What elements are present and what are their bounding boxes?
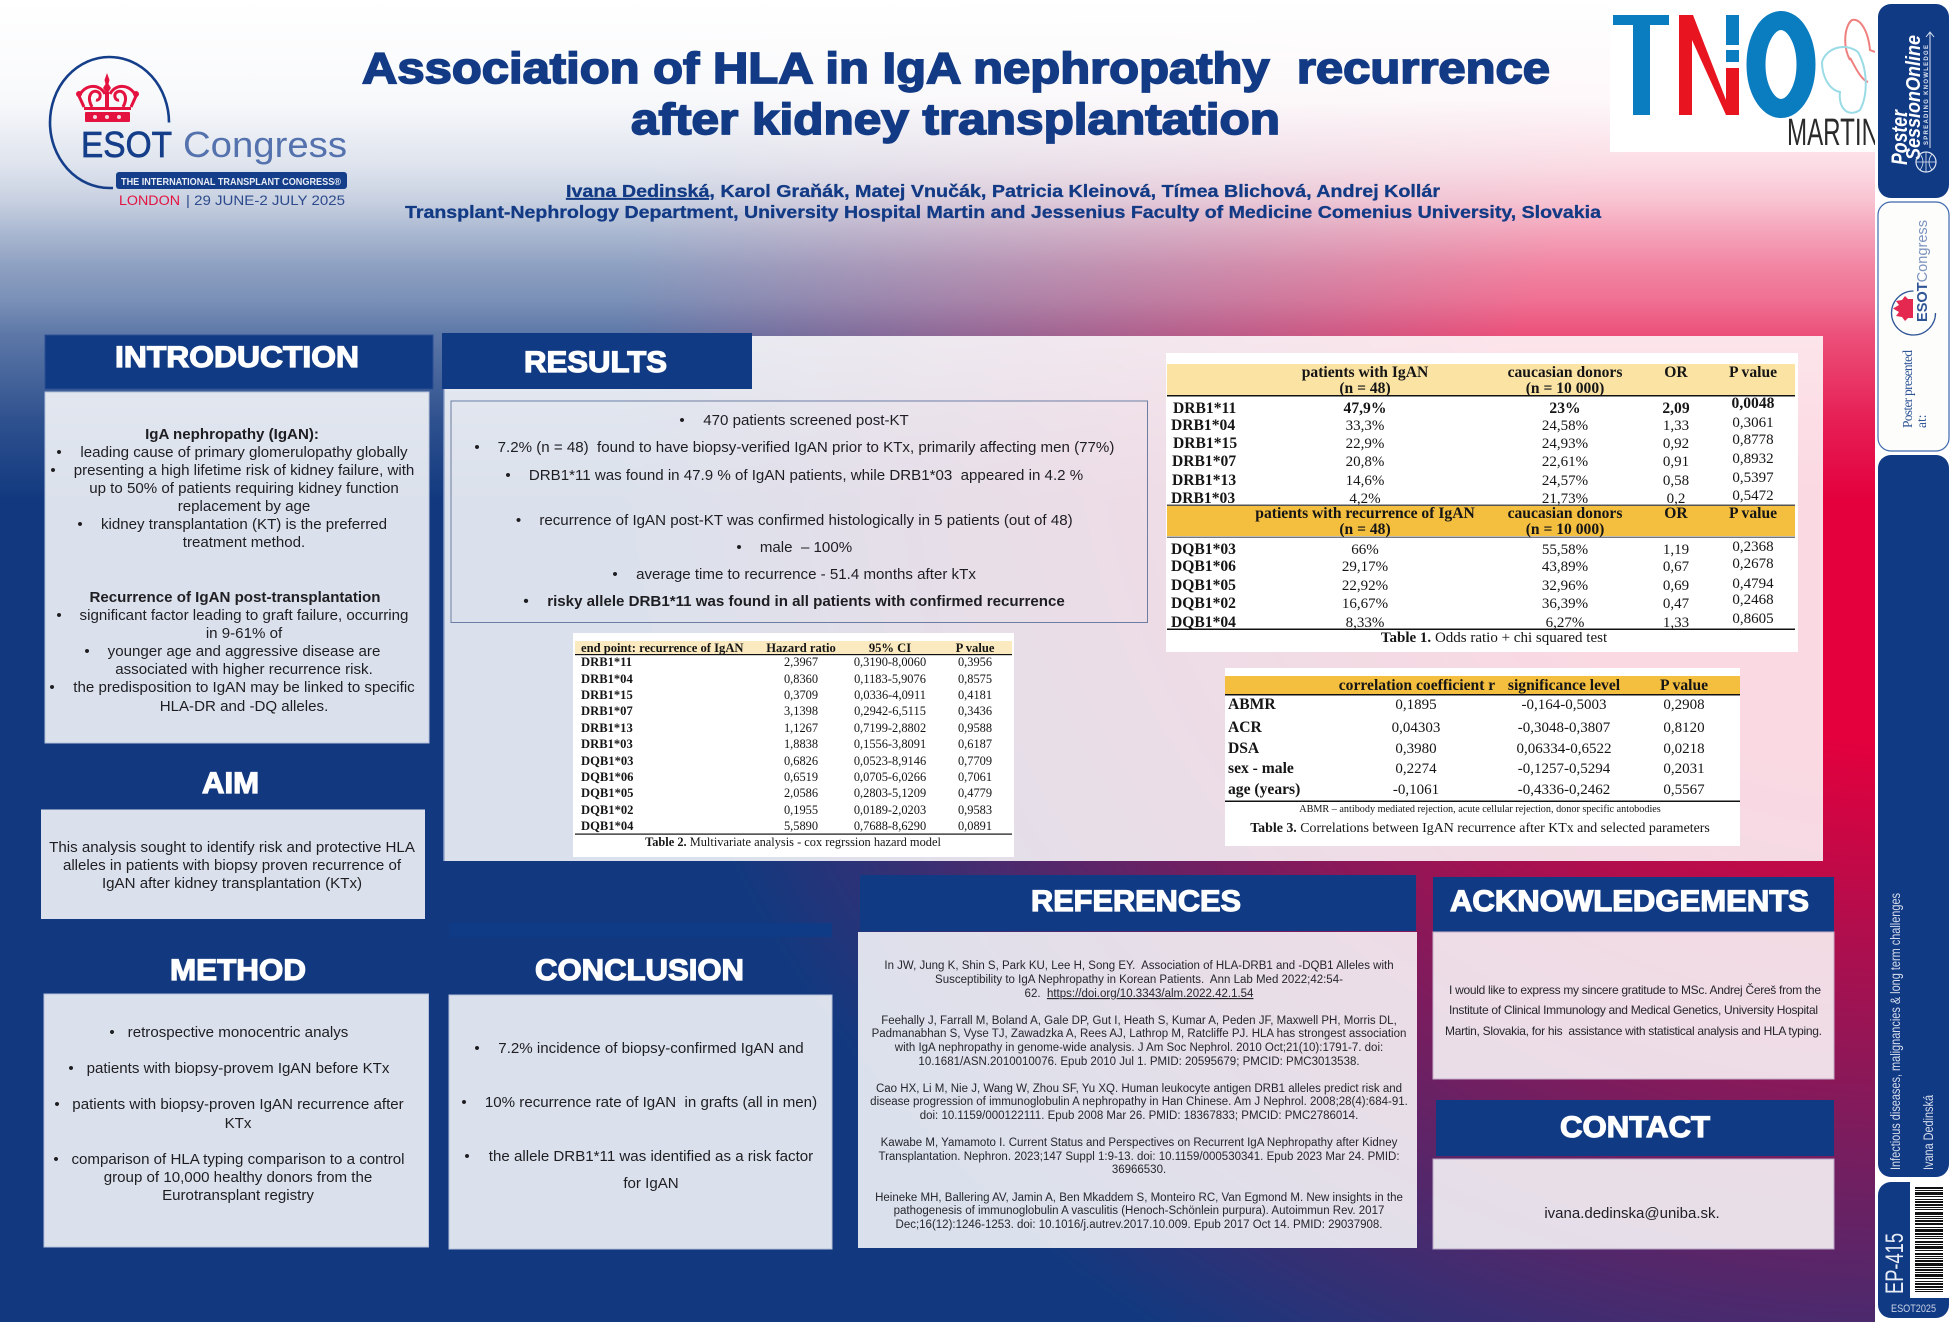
text: introduction body: younger age and aggressive disease are xyxy=(108,643,380,660)
panel: conclusion xyxy=(449,923,832,1249)
table 1: odds ratio and chi squared: 0,2 xyxy=(1667,491,1685,507)
table 2: multivariate cox regression xyxy=(573,633,1014,857)
table 1: odds ratio and chi squared: 0,2368 xyxy=(1732,539,1774,555)
table 1: odds ratio and chi squared: OR xyxy=(1664,505,1688,522)
text: introduction body: presenting a high lifetime risk of kidney failure, with xyxy=(74,462,414,479)
table 2: multivariate cox regression: DQB1*05 xyxy=(581,786,633,800)
text: reference list: Feehally J, Farrall M, Boland A, Gale DP, Gut I, Heath S, Kumar A, Peden JF, Maxwell PH, Morris DL, xyxy=(881,1015,1397,1027)
panel: results xyxy=(442,333,1823,861)
table 1: odds ratio and chi squared: 0,3061 xyxy=(1732,415,1774,431)
table 2: multivariate cox regression: 1,8838 xyxy=(784,737,818,751)
authors and affiliation: Ivana Dedinská, Karol Graňák, Matej Vnučák, Patricia Kleinová, Tímea Blichová, Andrej Kollár xyxy=(566,181,1440,201)
table 2: multivariate cox regression: DRB1*07 xyxy=(581,704,633,718)
table 2: multivariate cox regression: 0,4181 xyxy=(958,688,992,702)
table 2: multivariate cox regression: 2,3967 xyxy=(784,655,818,669)
table 2: multivariate cox regression: 0,4779 xyxy=(958,786,992,800)
text: introduction body: • xyxy=(56,444,62,461)
panel: contact: CONTACT xyxy=(1560,1111,1710,1144)
table 3: correlations: 0,04303 xyxy=(1392,720,1440,736)
table 2: multivariate cox regression: 0,1183-5,9076 xyxy=(854,672,926,686)
text: introduction body: treatment method. xyxy=(183,534,305,551)
text: conclusion body: the allele DRB1*11 was identified as a risk factor xyxy=(489,1148,813,1165)
table 3: correlations: -0,164-0,5003 xyxy=(1522,697,1606,713)
text: conclusion body: • xyxy=(474,1040,480,1057)
table 1: odds ratio and chi squared: caucasian donors xyxy=(1508,364,1622,381)
text: introduction body: Recurrence of IgAN post-transplantation xyxy=(89,589,381,606)
text: introduction body: the predisposition to IgAN may be linked to specific xyxy=(73,679,415,696)
table 1: odds ratio and chi squared: 2,09 xyxy=(1662,400,1690,417)
table 2: multivariate cox regression: DRB1*15 xyxy=(581,688,633,702)
table 2: multivariate cox regression: DQB1*06 xyxy=(581,770,633,784)
table 2: multivariate cox regression: 0,1556-3,8091 xyxy=(854,737,926,751)
table 2: multivariate cox regression: 0,7709 xyxy=(958,754,992,768)
table 2: multivariate cox regression: 0,3956 xyxy=(958,655,992,669)
table 2: multivariate cox regression: DQB1*03 xyxy=(581,754,633,768)
table 1: odds ratio and chi squared: 0,5472 xyxy=(1732,488,1774,504)
table 2: multivariate cox regression: 0,8575 xyxy=(958,672,992,686)
table 3: correlations: -0,1257-0,5294 xyxy=(1518,761,1611,777)
text: reference list: 36966530. xyxy=(1112,1164,1166,1176)
text box: results findings: • xyxy=(612,566,618,583)
text: acknowledgement body: Martin, Slovakia, for his assistance with statistical analysis and HLA typing. xyxy=(1445,1024,1822,1038)
text: introduction body: in 9-61% of xyxy=(206,625,283,642)
text: method body: patients with biopsy-proven IgAN recurrence after xyxy=(72,1096,404,1113)
table 2: multivariate cox regression: 0,6187 xyxy=(958,737,992,751)
table 2: multivariate cox regression: 5,5890 xyxy=(784,819,818,833)
table 1: odds ratio and chi squared: 0,91 xyxy=(1663,454,1689,470)
table 3: correlations: ABMR xyxy=(1228,696,1276,713)
text: conclusion body xyxy=(461,1040,817,1192)
text: reference list: Heineke MH, Ballering AV, Jamin A, Ben Mkaddem S, Monteiro RC, Van Egmond M. New insights in the xyxy=(875,1192,1403,1204)
table 1: odds ratio and chi squared: 21,73% xyxy=(1542,491,1588,507)
text: introduction body: up to 50% of patients requiring kidney function xyxy=(89,480,399,497)
table 2: multivariate cox regression: DRB1*13 xyxy=(581,721,633,735)
table 1: odds ratio and chi squared: 0,2678 xyxy=(1732,556,1774,572)
text: method body: • xyxy=(68,1060,74,1077)
table 3: correlations: DSA xyxy=(1228,740,1260,757)
table 1: odds ratio and chi squared: P value xyxy=(1729,364,1777,381)
table 2: multivariate cox regression: 95% CI xyxy=(869,641,911,655)
logo: ESOT Congress: ESOT xyxy=(81,124,172,165)
text: method body: comparison of HLA typing comparison to a control xyxy=(71,1151,405,1168)
sidebar tab: Poster presented at ESOT Congress xyxy=(1878,202,1949,451)
table 2: multivariate cox regression: DRB1*04 xyxy=(581,672,633,686)
table 2: multivariate cox regression: 0,6519 xyxy=(784,770,818,784)
table 1: odds ratio and chi squared: DRB1*03 xyxy=(1171,490,1235,507)
table 1: odds ratio and chi squared: DRB1*04 xyxy=(1171,417,1235,434)
text box: results findings: male – 100% xyxy=(760,539,852,556)
text: introduction body: IgA nephropathy (IgAN): xyxy=(145,426,319,443)
table 1: odds ratio and chi squared: 33,3% xyxy=(1346,418,1384,434)
table 3: correlations: significance level xyxy=(1508,677,1621,694)
text: reference list: doi: 10.1159/000122111. Epub 2008 Mar 26. PMID: 18367833; PMCID: PMC2786014. xyxy=(920,1110,1358,1122)
text: introduction body: • xyxy=(56,607,62,624)
table 2: multivariate cox regression: 0,3436 xyxy=(958,704,992,718)
table 1: odds ratio and chi squared: 1,33 xyxy=(1663,615,1689,631)
text: reference list: Cao HX, Li M, Nie J, Wang W, Zhou SF, Yu XQ. Human leukocyte antigen DRB1 alleles predict risk and xyxy=(876,1083,1402,1095)
table 3: correlations: ABMR – antibody mediated rejection, acute cellular rejection, donor specific antobodies xyxy=(1299,804,1661,815)
text: introduction body: leading cause of primary glomerulopathy globally xyxy=(80,444,408,461)
table 1: odds ratio and chi squared: 6,27% xyxy=(1546,615,1584,631)
text box: results findings: • xyxy=(516,512,521,529)
sidebar tab: session and author: Ivana Dedinská xyxy=(1921,1095,1936,1170)
table 1: odds ratio and chi squared: DQB1*02 xyxy=(1171,595,1236,612)
panel: aim xyxy=(41,767,425,919)
text box: results findings: 470 patients screened post-KT xyxy=(703,412,909,429)
table 3: correlations: -0,1061 xyxy=(1393,782,1439,798)
text: method body: • xyxy=(53,1151,59,1168)
table 2: multivariate cox regression: 0,7199-2,8802 xyxy=(854,721,926,735)
table 1: odds ratio and chi squared: P value xyxy=(1729,505,1777,522)
text box: results findings: 7.2% (n = 48) found to have biopsy-verified IgAN prior to KTx, primarily affecting men (77%) xyxy=(498,439,1114,456)
table 3: correlations: 0,0218 xyxy=(1663,741,1705,757)
panel: conclusion: CONCLUSION xyxy=(535,954,744,987)
table 2: multivariate cox regression: 0,2803-5,1209 xyxy=(854,786,926,800)
text: reference list: Kawabe M, Yamamoto I. Current Status and Perspectives on Recurrent IgA Nephropathy after Kidney xyxy=(881,1137,1398,1149)
text: reference list: 62. https://doi.org/10.3343/alm.2022.42.1.54 xyxy=(1025,988,1254,1000)
heading: introduction xyxy=(45,335,433,389)
panel: references: REFERENCES xyxy=(1031,885,1241,918)
table 2: multivariate cox regression: 0,1955 xyxy=(784,803,818,817)
sidebar tab: Poster Session Online xyxy=(1878,4,1949,198)
table 2: multivariate cox regression: DRB1*03 xyxy=(581,737,633,751)
text: introduction body: HLA-DR and -DQ alleles. xyxy=(160,698,328,715)
table 2: multivariate cox regression: 3,1398 xyxy=(784,704,818,718)
table 1: odds ratio and chi squared: (n = 48) xyxy=(1339,521,1391,538)
table 1: odds ratio and chi squared: DQB1*04 xyxy=(1171,614,1236,631)
table 2: multivariate cox regression: 0,7688-8,6290 xyxy=(854,819,926,833)
table 2: multivariate cox regression: 0,0336-4,0911 xyxy=(854,688,926,702)
table 1: odds ratio and chi squared: 0,5397 xyxy=(1732,470,1774,486)
table 1: odds ratio and chi squared: caucasian donors xyxy=(1508,505,1622,522)
table 1: odds ratio and chi squared: (n = 10 000) xyxy=(1526,521,1604,538)
sidebar tab: poster number and barcode xyxy=(1878,1182,1949,1318)
title: after kidney transplantation xyxy=(631,95,1280,144)
table 1: odds ratio and chi squared: 0,8605 xyxy=(1732,611,1774,627)
text: method body: • xyxy=(54,1096,60,1113)
text: reference list: pathogenesis of immunoglobulin A vasculitis (Henoch-Schönlein purpura). Autoimmun Rev. 2017 xyxy=(894,1205,1384,1217)
table 1: odds ratio and chi squared: 0,58 xyxy=(1663,473,1689,489)
table 2: multivariate cox regression: DQB1*04 xyxy=(581,819,634,833)
text: aim body: IgAN after kidney transplantation (KTx) xyxy=(102,875,362,892)
panel: introduction xyxy=(45,335,433,743)
table 1: odds ratio and chi squared: 0,8778 xyxy=(1732,432,1774,448)
text: method body: • xyxy=(109,1024,115,1041)
table 1: odds ratio and chi squared: 43,89% xyxy=(1542,559,1588,575)
table 3: correlations: ACR xyxy=(1228,719,1263,736)
logo: ESOT Congress: LONDON xyxy=(119,193,180,208)
table 3: correlations: -0,4336-0,2462 xyxy=(1518,782,1610,798)
table 1: odds ratio and chi squared: 36,39% xyxy=(1542,596,1588,612)
table 1: odds ratio and chi squared: 55,58% xyxy=(1542,542,1588,558)
table 3: correlations: 0,2031 xyxy=(1663,761,1705,777)
table 1: odds ratio and chi squared xyxy=(1166,353,1798,652)
table 1: odds ratio and chi squared: 23% xyxy=(1549,400,1581,417)
table 3: correlations: correlation coefficient r xyxy=(1339,677,1495,694)
text: reference list: Susceptibility to IgA Nephropathy in Korean Patients. Ann Lab Med 2022;42:54- xyxy=(935,974,1343,986)
text box: results findings: DRB1*11 was found in 47.9 % of IgAN patients, while DRB1*03 appeared in 4.2 % xyxy=(529,467,1083,484)
sidebar tab: session and author: Infectious diseases, malignancies & long term challenges xyxy=(1888,893,1903,1170)
table 1: odds ratio and chi squared: 16,67% xyxy=(1342,596,1388,612)
text: reference list: disease progression of immunoglobulin A nephropathy in Han Chinese. Am J Nephrol. 2008;28(4):684-91. xyxy=(870,1096,1408,1108)
table 2: multivariate cox regression: Table 2. Multivariate analysis - cox regrssion hazard model xyxy=(645,835,941,849)
table 1: odds ratio and chi squared: 32,96% xyxy=(1542,578,1588,594)
title xyxy=(362,44,1550,144)
table 2: multivariate cox regression: 0,0189-2,0203 xyxy=(854,803,926,817)
table 1: odds ratio and chi squared: DRB1*11 xyxy=(1173,400,1236,417)
heading: introduction: INTRODUCTION xyxy=(115,341,359,374)
logo: TNO Martin xyxy=(1610,0,1879,154)
sidebar tab: Poster Session Online: SPREADING KNOWLEDGE xyxy=(1924,45,1930,145)
table 2: multivariate cox regression: 0,9588 xyxy=(958,721,992,735)
logo: ESOT Congress: THE INTERNATIONAL TRANSPLANT CONGRESS® xyxy=(121,176,341,188)
text: introduction body: associated with higher recurrence risk. xyxy=(115,661,373,678)
table 1: odds ratio and chi squared: DQB1*05 xyxy=(1171,577,1236,594)
table 1: odds ratio and chi squared: DQB1*06 xyxy=(1171,558,1236,575)
text box: results findings: • xyxy=(523,593,529,610)
text: reference list: Padmanabhan S, Vyse TJ, Zawadzka A, Rees AJ, Lathrop M, Ratcliffe PJ. HLA has strongest association xyxy=(872,1028,1406,1040)
table 1: odds ratio and chi squared: DRB1*07 xyxy=(1172,453,1236,470)
table 3: correlations: sex - male xyxy=(1228,760,1294,777)
text: method body: retrospective monocentric analys xyxy=(128,1024,348,1041)
text box: results findings: • xyxy=(736,539,742,556)
table 1: odds ratio and chi squared: 47,9% xyxy=(1344,400,1386,417)
text box: results findings: risky allele DRB1*11 was found in all patients with confirmed recurrence xyxy=(547,593,1065,610)
table 3: correlations xyxy=(1225,668,1740,846)
sidebar tab: Poster presented at ESOT Congress: Poster presented xyxy=(1900,350,1915,428)
sidebar tab: session and author xyxy=(1878,455,1949,1177)
text: reference list: 10.1681/ASN.2010010076. Epub 2010 Jul 1. PMID: 20595679; PMCID: PMC3013538. xyxy=(918,1056,1360,1068)
text: conclusion body: 10% recurrence rate of IgAN in grafts (all in men) xyxy=(485,1094,817,1111)
panel: contact xyxy=(1433,1100,1834,1249)
table 3: correlations: Table 3. Correlations between IgAN recurrence after KTx and selected parameters xyxy=(1250,821,1710,836)
text: reference list: In JW, Jung K, Shin S, Park KU, Lee H, Song EY. Association of HLA-DRB1 and -DQB1 Alleles with xyxy=(884,960,1394,972)
text: introduction body: • xyxy=(77,516,83,533)
text: introduction body: kidney transplantation (KT) is the preferred xyxy=(101,516,387,533)
text box: results findings: average time to recurrence - 51.4 months after kTx xyxy=(636,566,976,583)
table 2: multivariate cox regression: 0,8360 xyxy=(784,672,818,686)
table 1: odds ratio and chi squared: 14,6% xyxy=(1346,473,1384,489)
table 2: multivariate cox regression: 1,1267 xyxy=(784,721,818,735)
text: aim body xyxy=(49,839,416,892)
table 2: multivariate cox regression: 0,7061 xyxy=(958,770,992,784)
table 2: multivariate cox regression: 0,0705-6,0266 xyxy=(854,770,926,784)
sidebar tab: poster number and barcode: EP-415 xyxy=(1881,1233,1909,1294)
table 1: odds ratio and chi squared: 24,58% xyxy=(1542,418,1588,434)
logo: ESOT Congress: Congress xyxy=(183,124,347,165)
barcode xyxy=(1915,1187,1943,1293)
table 1: odds ratio and chi squared: 22,9% xyxy=(1346,436,1384,452)
text: aim body: alleles in patients with biopsy proven recurrence of xyxy=(63,857,402,874)
logo: ESOT Congress xyxy=(50,57,347,208)
panel: references xyxy=(858,875,1417,1248)
table 1: odds ratio and chi squared: Table 1. Odds ratio + chi squared test xyxy=(1381,630,1608,646)
text: reference list: with IgA nephropathy in genome-wide analysis. J Am Soc Nephrol. 2010 Oct;21(10):1791-7. doi: xyxy=(894,1042,1383,1054)
table 3: correlations: 0,06334-0,6522 xyxy=(1516,741,1612,757)
table 1: odds ratio and chi squared: (n = 48) xyxy=(1339,380,1391,397)
text: acknowledgement body: I would like to express my sincere gratitude to MSc. Andrej Čereš from the xyxy=(1449,982,1821,997)
table 1: odds ratio and chi squared: patients with recurrence of IgAN xyxy=(1255,505,1475,522)
table 1: odds ratio and chi squared: 0,0048 xyxy=(1732,395,1775,412)
table 1: odds ratio and chi squared: 0,2468 xyxy=(1732,592,1774,608)
table 2: multivariate cox regression: 0,3709 xyxy=(784,688,818,702)
table 1: odds ratio and chi squared: 20,8% xyxy=(1346,454,1384,470)
table 2: multivariate cox regression: 0,9583 xyxy=(958,803,992,817)
logo: ESOT Congress: | 29 JUNE-2 JULY 2025 xyxy=(186,193,345,208)
table 1: odds ratio and chi squared: 0,47 xyxy=(1663,596,1690,612)
panel: acknowledgements: ACKNOWLEDGEMENTS xyxy=(1450,885,1809,918)
table 1: odds ratio and chi squared: 29,17% xyxy=(1342,559,1388,575)
text: reference list: Transplantation. Nephron. 2023;147 Suppl 1:9-13. doi: 10.1159/000530341. Epub 2023 Mar 24. PMID: xyxy=(878,1151,1400,1163)
text: method body xyxy=(53,1024,405,1204)
table 1: odds ratio and chi squared: 8,33% xyxy=(1346,615,1384,631)
text: conclusion body: 7.2% incidence of biopsy-confirmed IgAN and xyxy=(498,1040,804,1057)
table 1: odds ratio and chi squared: 22,92% xyxy=(1342,578,1388,594)
text: reference list: Dec;16(12):1246-1253. doi: 10.1016/j.autrev.2017.10.009. Epub 2017 Oct 14. PMID: 29037908. xyxy=(896,1219,1382,1231)
table 1: odds ratio and chi squared: (n = 10 000) xyxy=(1526,380,1604,397)
table 1: odds ratio and chi squared: 24,93% xyxy=(1542,436,1588,452)
text: method body: Eurotransplant registry xyxy=(162,1187,314,1204)
table 1: odds ratio and chi squared: patients with IgAN xyxy=(1302,364,1429,381)
text: aim body: This analysis sought to identify risk and protective HLA xyxy=(49,839,416,856)
icon: crown xyxy=(76,73,139,122)
table 1: odds ratio and chi squared: 0,69 xyxy=(1663,578,1689,594)
text: introduction body: • xyxy=(84,643,90,660)
sidebar tab: Poster Session Online: Poster xyxy=(1887,109,1912,165)
table 2: multivariate cox regression: 0,2942-6,5115 xyxy=(854,704,926,718)
table 1: odds ratio and chi squared: 22,61% xyxy=(1542,454,1588,470)
table 1: odds ratio and chi squared: 1,33 xyxy=(1663,418,1689,434)
table 3: correlations: 0,8120 xyxy=(1663,720,1705,736)
panel: acknowledgements xyxy=(1433,877,1834,1079)
table 3: correlations: 0,1895 xyxy=(1395,697,1437,713)
text: method body: patients with biopsy-provem IgAN before KTx xyxy=(87,1060,390,1077)
sidebar tab: Poster presented at ESOT Congress: ESOTCongress xyxy=(1915,220,1931,322)
table 1: odds ratio and chi squared: 66% xyxy=(1351,542,1379,558)
heading: results xyxy=(442,333,752,389)
table 3: correlations: 0,2274 xyxy=(1395,761,1437,777)
text box: results findings: • xyxy=(505,467,511,484)
text box: results findings: • xyxy=(474,439,480,456)
authors and affiliation: Transplant-Nephrology Department, University Hospital Martin and Jessenius Faculty of Medicine Comenius University, Slovakia xyxy=(405,202,1601,222)
table 3: correlations: -0,3048-0,3807 xyxy=(1518,720,1611,736)
table 2: multivariate cox regression: DRB1*11 xyxy=(581,655,632,669)
table 3: correlations: 0,5567 xyxy=(1663,782,1705,798)
table 2: multivariate cox regression: P value xyxy=(956,641,995,655)
table 1: odds ratio and chi squared: 0,8932 xyxy=(1732,451,1774,467)
table 1: odds ratio and chi squared: 0,67 xyxy=(1663,559,1690,575)
text: conclusion body: • xyxy=(464,1148,470,1165)
table 1: odds ratio and chi squared: DQB1*03 xyxy=(1171,541,1236,558)
authors and affiliation xyxy=(405,181,1601,222)
text: method body: group of 10,000 healthy donors from the xyxy=(104,1169,372,1186)
table 1: odds ratio and chi squared: OR xyxy=(1664,364,1688,381)
text box: results findings: recurrence of IgAN post-KT was confirmed histologically in 5 patients (out of 48) xyxy=(539,512,1073,529)
text: introduction body: replacement by age xyxy=(178,498,310,515)
table 2: multivariate cox regression: 0,6826 xyxy=(784,754,818,768)
table 1: odds ratio and chi squared: 0,4794 xyxy=(1732,576,1774,592)
text: conclusion body: for IgAN xyxy=(623,1175,679,1192)
table 3: correlations: P value xyxy=(1660,677,1708,694)
title: Association of HLA in IgA nephropathy recurrence xyxy=(362,44,1550,93)
table 1: odds ratio and chi squared: 1,19 xyxy=(1663,542,1689,558)
table 3: correlations: 0,3980 xyxy=(1395,741,1437,757)
heading: results: RESULTS xyxy=(524,346,667,379)
table 1: odds ratio and chi squared: DRB1*13 xyxy=(1172,472,1236,489)
table 1: odds ratio and chi squared: DRB1*15 xyxy=(1173,435,1237,452)
text: introduction body: • xyxy=(49,679,55,696)
text: reference list xyxy=(870,960,1408,1231)
table 2: multivariate cox regression: 0,0891 xyxy=(958,819,992,833)
table 2: multivariate cox regression: end point: recurrence of IgAN xyxy=(581,641,744,655)
table 1: odds ratio and chi squared: 4,2% xyxy=(1349,491,1381,507)
table 2: multivariate cox regression: 0,3190-8,0060 xyxy=(854,655,926,669)
panel: method xyxy=(44,954,428,1247)
table 2: multivariate cox regression: 2,0586 xyxy=(784,786,818,800)
panel: contact: ivana.dedinska@uniba.sk. xyxy=(1544,1205,1720,1222)
sidebar tab: poster number and barcode: ESOT2025 xyxy=(1891,1303,1936,1315)
text: conclusion body: • xyxy=(461,1094,467,1111)
text: introduction body xyxy=(49,426,415,715)
table 1: odds ratio and chi squared: 24,57% xyxy=(1542,473,1588,489)
table 2: multivariate cox regression: 0,0523-8,9146 xyxy=(854,754,926,768)
text: introduction body: significant factor leading to graft failure, occurring xyxy=(80,607,408,624)
table 3: correlations: age (years) xyxy=(1228,781,1300,798)
table 2: multivariate cox regression: DQB1*02 xyxy=(581,803,633,817)
text box: results findings: • xyxy=(679,412,685,429)
text box: results findings xyxy=(451,401,1148,622)
logo: TNO Martin: MARTIN xyxy=(1787,112,1879,154)
text: method body: KTx xyxy=(225,1115,252,1132)
sidebar tab: Poster presented at ESOT Congress: at: xyxy=(1914,414,1929,428)
text: acknowledgement body: Institute of Clinical Immunology and Medical Genetics, University Hospital xyxy=(1449,1003,1818,1017)
text: introduction body: • xyxy=(50,462,56,479)
text: acknowledgement body xyxy=(1445,982,1822,1038)
panel: aim: AIM xyxy=(202,767,259,800)
table 2: multivariate cox regression: Hazard ratio xyxy=(766,641,836,655)
table 1: odds ratio and chi squared: 0,92 xyxy=(1663,436,1689,452)
sidebar tab: Poster Session Online: SessionOnline xyxy=(1903,35,1925,160)
table 3: correlations: 0,2908 xyxy=(1663,697,1705,713)
panel: method: METHOD xyxy=(170,954,306,987)
